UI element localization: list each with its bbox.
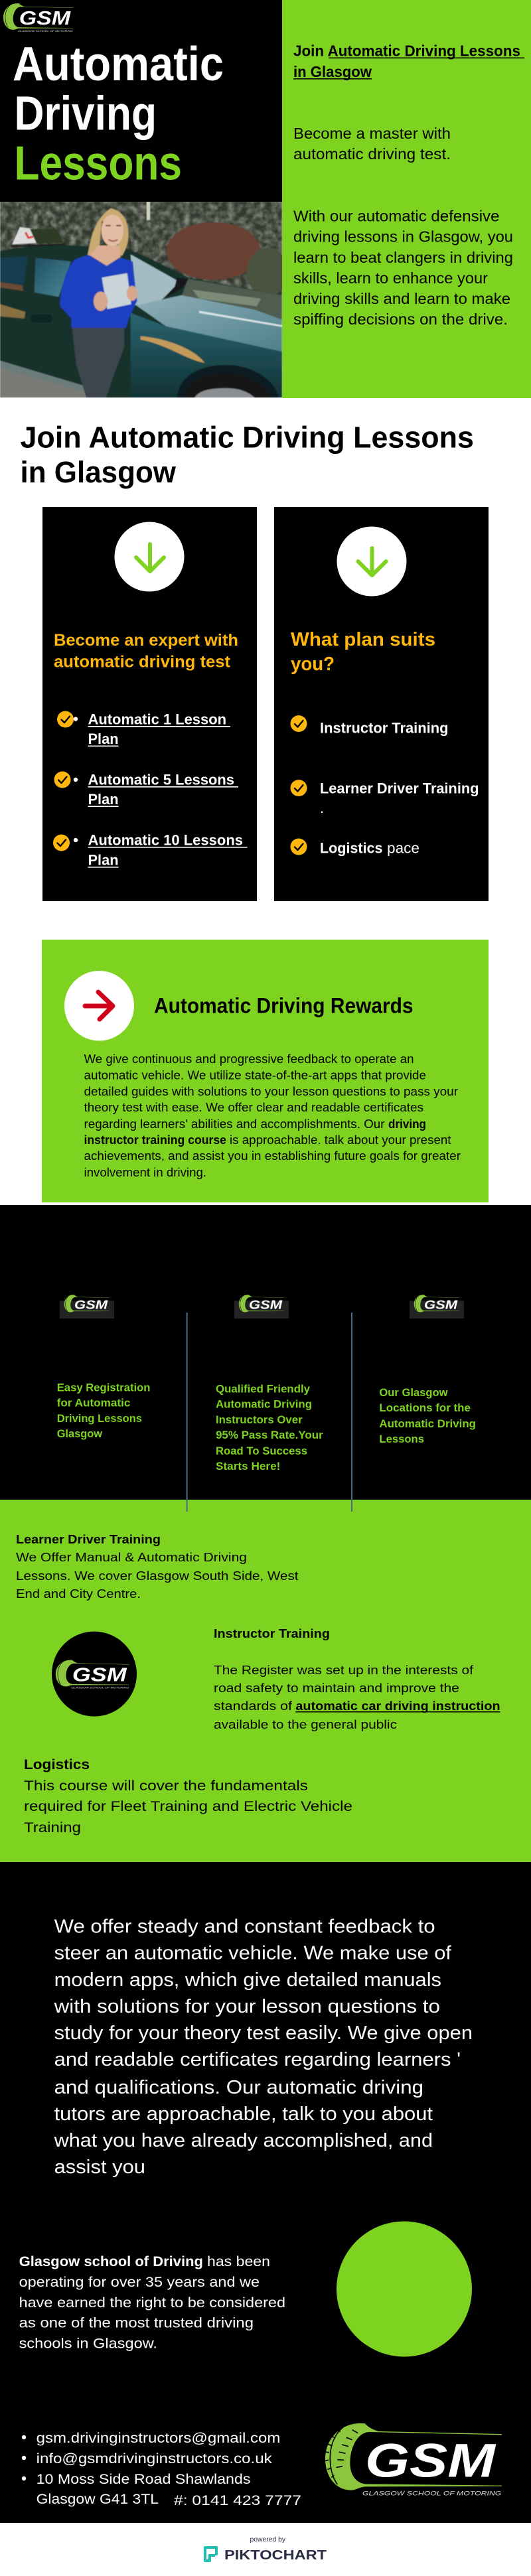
logo: column 1: GSM [74,1297,108,1311]
logistics text: required for Fleet Training and Electric Vehicle [24,1799,352,1814]
instructor training text: available to the general public [214,1718,397,1731]
hero panel: black title block [0,0,282,202]
panel heading [291,629,435,675]
feedback paragraph: with solutions for your lesson questions to [54,1996,440,2017]
feature text: glasgow locations [379,1386,476,1445]
list item: 10 lessons: Plan [88,852,118,868]
logo: GSM top: GSM [19,7,72,29]
rewards paragraph: achievements, and assist you in establishing future goals for greater [84,1149,461,1163]
contact list: 10 Moss Side Road Shawlands [37,2472,250,2487]
intro paragraph [293,207,513,328]
about paragraph: have earned the right to be considered [19,2295,285,2311]
footer: powered by piktochart [205,2536,327,2563]
intro paragraph: spiffing decisions on the drive. [293,311,508,328]
panel heading [54,631,238,672]
intro paragraph: driving lessons in Glasgow, you [293,228,513,246]
list item: 5 lessons [54,771,238,808]
feature text: glasgow locations: Locations for the [379,1401,471,1414]
icon: red right arrow [64,971,134,1040]
logistics text: Logistics [24,1757,90,1772]
green band: training details [0,1500,531,1862]
section heading [20,421,474,489]
about paragraph: Glasgow school of Driving [19,2254,203,2269]
instructor training text: automatic car driving instruction [295,1699,500,1713]
list item: logistics [291,839,419,856]
list item: 5 lessons: Plan [88,791,118,808]
rewards paragraph: detailed guides with solutions to your lesson questions to pass your [84,1085,458,1098]
feedback paragraph: and readable certificates regarding learners ' [54,2049,461,2070]
feature text: easy registration: Glasgow [57,1427,103,1440]
about paragraph: has been [207,2254,270,2269]
feature text: glasgow locations: Our Glasgow [379,1386,448,1399]
feature text: qualified instructors: 95% Pass Rate.Your [216,1429,323,1441]
footer: powered by piktochart: powered by [250,2536,285,2543]
intro tagline: automatic driving test. [293,145,451,163]
list item: learner driver training: Learner Driver Training [320,780,479,796]
intro paragraph: driving skills and learn to make [293,290,510,307]
about paragraph [19,2254,285,2352]
list item: learner driver training: . [320,800,324,816]
contact list: info@gsmdrivinginstructors.co.uk [37,2451,272,2467]
panel heading: automatic driving test [54,653,231,672]
intro paragraph: skills, learn to enhance your [293,269,488,287]
list item: logistics: Logistics [320,840,382,856]
title [13,38,224,190]
logo: GSM top [3,3,73,33]
logo: GSM large [325,2423,502,2496]
feedback paragraph: study for your theory test easily. We give open [54,2023,473,2044]
feedback paragraph: modern apps, which give detailed manuals [54,1969,441,1991]
feedback paragraph: what you have already accomplished, and [54,2130,433,2151]
rewards paragraph: instructor training course [84,1133,226,1147]
instructor training text: Instructor Training [214,1627,330,1640]
instructor training text: road safety to maintain and improve the [214,1682,459,1695]
list item: 1 lesson [57,711,230,747]
feature text: glasgow locations: Lessons [379,1433,424,1445]
panel heading: What plan suits [291,629,435,650]
feature text: easy registration: for Automatic [57,1396,130,1409]
logistics text: Training [24,1820,81,1835]
icon: piktochart mark [205,2547,216,2561]
logistics text: This course will cover the fundamentals [24,1778,308,1794]
logo: column 1 [60,1295,114,1319]
learner driver training text [16,1533,299,1601]
divider lines between features [187,1313,352,1512]
rewards paragraph: driving [388,1117,426,1131]
title: Driving [15,88,157,141]
intro paragraph: learn to beat clangers in driving [293,249,513,266]
learner driver training text: Lessons. We cover Glasgow South Side, West [16,1569,299,1583]
rewards paragraph: is approachable. talk about your present [230,1133,451,1147]
feature text: qualified instructors: Automatic Driving [216,1397,312,1411]
feedback paragraph: steer an automatic vehicle. We make use of [54,1943,452,1964]
instructor training text: The Register was set up in the interests of [214,1664,474,1677]
feature text: easy registration [57,1382,150,1440]
feature text: easy registration: Driving Lessons [57,1412,142,1425]
about paragraph: schools in Glasgow. [19,2336,157,2352]
intro heading link: Join Automatic Driving Lessons [293,42,520,60]
intro heading link: in Glasgow [293,63,372,80]
list item: 1 lesson: Automatic 1 Lesson [88,711,226,727]
title: Automatic [13,38,224,91]
about paragraph: as one of the most trusted driving [19,2316,254,2330]
hero photo: learner with pass certificate beside car [0,201,289,397]
section heading: Join Automatic Driving Lessons [20,421,474,454]
list item: 10 lessons: Automatic 10 Lessons [88,832,243,848]
logo: GSM large: GLASGOW SCHOOL OF MOTORING [362,2490,501,2496]
contact list: #: 0141 423 7777 [174,2493,301,2508]
intro paragraph: With our automatic defensive [293,207,499,224]
intro tagline [293,125,451,163]
rewards paragraph: automatic vehicle. We utilize state-of-the-art apps that provide [84,1069,426,1082]
instructor training text [214,1627,500,1731]
list item: 10 lessons [53,832,247,868]
panel: become an expert [42,507,257,901]
logistics text [24,1757,352,1835]
feature text: qualified instructors: Qualified Friendly [216,1383,311,1395]
rewards paragraph: regarding learners' abilities and accomplishments. Our [84,1117,385,1131]
feature text: easy registration: Easy Registration [57,1382,150,1394]
panel heading: you? [291,654,335,675]
feedback paragraph: tutors are approachable, talk to you about [54,2104,433,2125]
logo: column 3 [410,1295,464,1319]
logo: GSM in black circle [52,1632,137,1717]
rewards paragraph [84,1052,461,1179]
black band: three features [0,1205,531,1500]
logo: GSM in black circle: GSM [72,1665,127,1685]
feature text: qualified instructors [216,1383,323,1472]
logo: column 2: GSM [249,1297,283,1311]
icon: down arrow [337,527,406,596]
logo: GSM in black circle: GLASGOW SCHOOL OF MOTORING [71,1687,129,1689]
panel: automatic driving rewards [42,940,489,1202]
learner driver training text: End and City Centre. [16,1587,141,1601]
feedback paragraph: and qualifications. Our automatic driving [54,2077,423,2098]
rewards paragraph: theory test with ease. We offer clear and readable certificates [84,1101,423,1114]
panel heading: Become an expert with [54,631,238,650]
feedback paragraph: We offer steady and constant feedback to [54,1916,435,1938]
hero panel: green intro text [282,0,531,398]
black footer panel [0,1862,531,2523]
footer: powered by piktochart: PIKTOCHART [224,2548,327,2563]
list item: logistics: pace [387,840,419,856]
instructor training text: standards of [214,1699,293,1713]
learner driver training text: We Offer Manual & Automatic Driving [16,1551,247,1564]
list item: 1 lesson: Plan [88,731,118,747]
contact list [22,2431,301,2508]
rewards paragraph: involvement in driving. [84,1166,206,1179]
title: Lessons [15,137,182,190]
logo: GSM top: GLASGOW SCHOOL OF MOTORING [18,30,73,33]
feature text: qualified instructors: Starts Here! [216,1460,280,1472]
icon: down arrow [114,522,185,592]
learner driver training text: Learner Driver Training [16,1533,161,1546]
contact list: gsm.drivinginstructors@gmail.com [37,2431,280,2446]
rewards paragraph: We give continuous and progressive feedback to operate an [84,1052,414,1066]
about paragraph: operating for over 35 years and we [19,2275,260,2290]
rewards heading: Automatic Driving Rewards [154,994,413,1018]
feedback paragraph [54,1916,473,2178]
list item: 5 lessons: Automatic 5 Lessons [88,771,234,788]
list item: instructor training [291,715,449,737]
list item: learner driver training [291,780,479,816]
list item: instructor training: Instructor Training [320,719,449,737]
intro heading link [293,42,524,80]
feedback paragraph: assist you [54,2157,145,2178]
green circle [337,2222,472,2357]
feature text: glasgow locations: Automatic Driving [379,1417,476,1430]
feature text: qualified instructors: Instructors Over [216,1413,303,1426]
contact list: Glasgow G41 3TL [37,2492,159,2507]
logo: GSM large: GSM [365,2435,496,2488]
logo: column 2 [234,1295,289,1319]
panel: what plan suits you [274,507,489,901]
intro tagline: Become a master with [293,125,451,142]
feature text: qualified instructors: Road To Success [216,1445,307,1457]
logo: column 3: GSM [424,1297,458,1311]
section heading: in Glasgow [20,455,177,489]
